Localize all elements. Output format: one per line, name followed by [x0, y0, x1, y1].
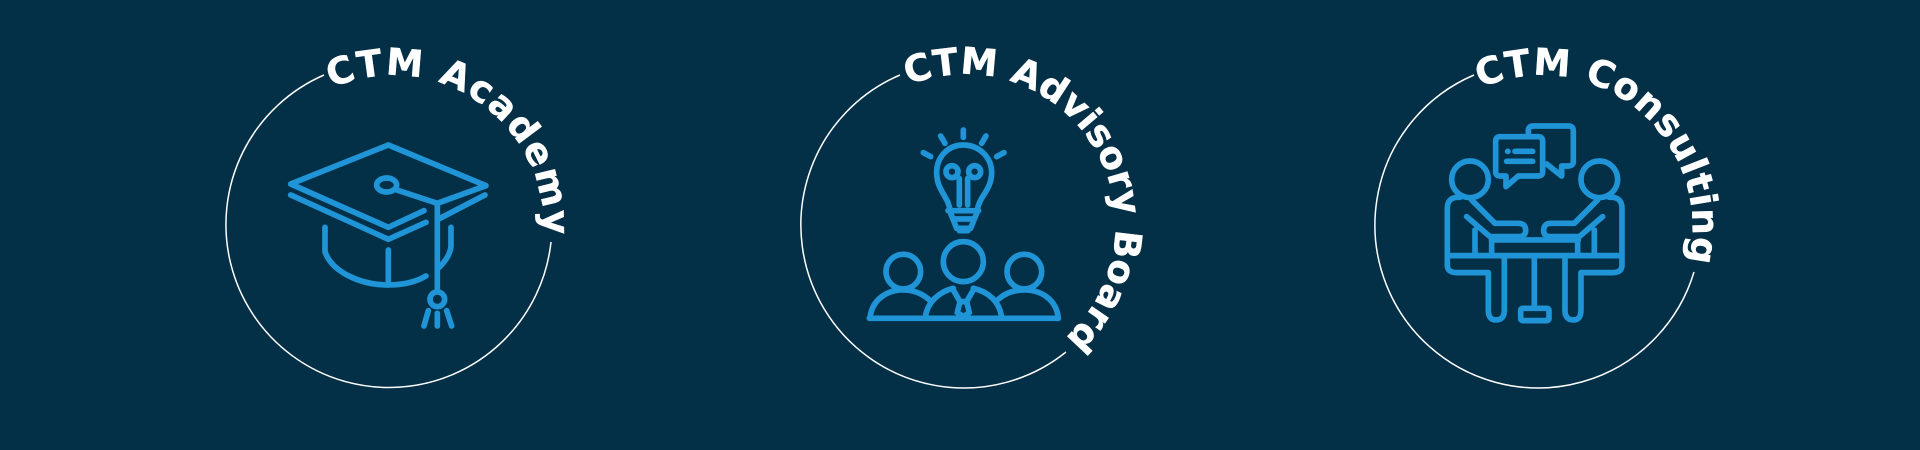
icon: light bulb over three people: [869, 130, 1058, 318]
heading: CTM Consulting: CTM Consulting: [1476, 47, 1720, 262]
ring: consulting: [1375, 75, 1694, 388]
heading: CTM Academy: CTM Academy: [328, 47, 564, 234]
ring: academy: [226, 75, 551, 388]
icon: graduation cap: [291, 145, 486, 326]
icon: two people talking at a table: [1447, 126, 1622, 321]
panel: CTM Consulting: [1374, 47, 1720, 389]
heading: CTM Advisory Board: CTM Advisory Board: [905, 46, 1143, 356]
panel: CTM Advisory Board: [800, 46, 1143, 389]
ring: advisory board: [801, 75, 1066, 388]
panel: CTM Academy: [225, 47, 564, 388]
